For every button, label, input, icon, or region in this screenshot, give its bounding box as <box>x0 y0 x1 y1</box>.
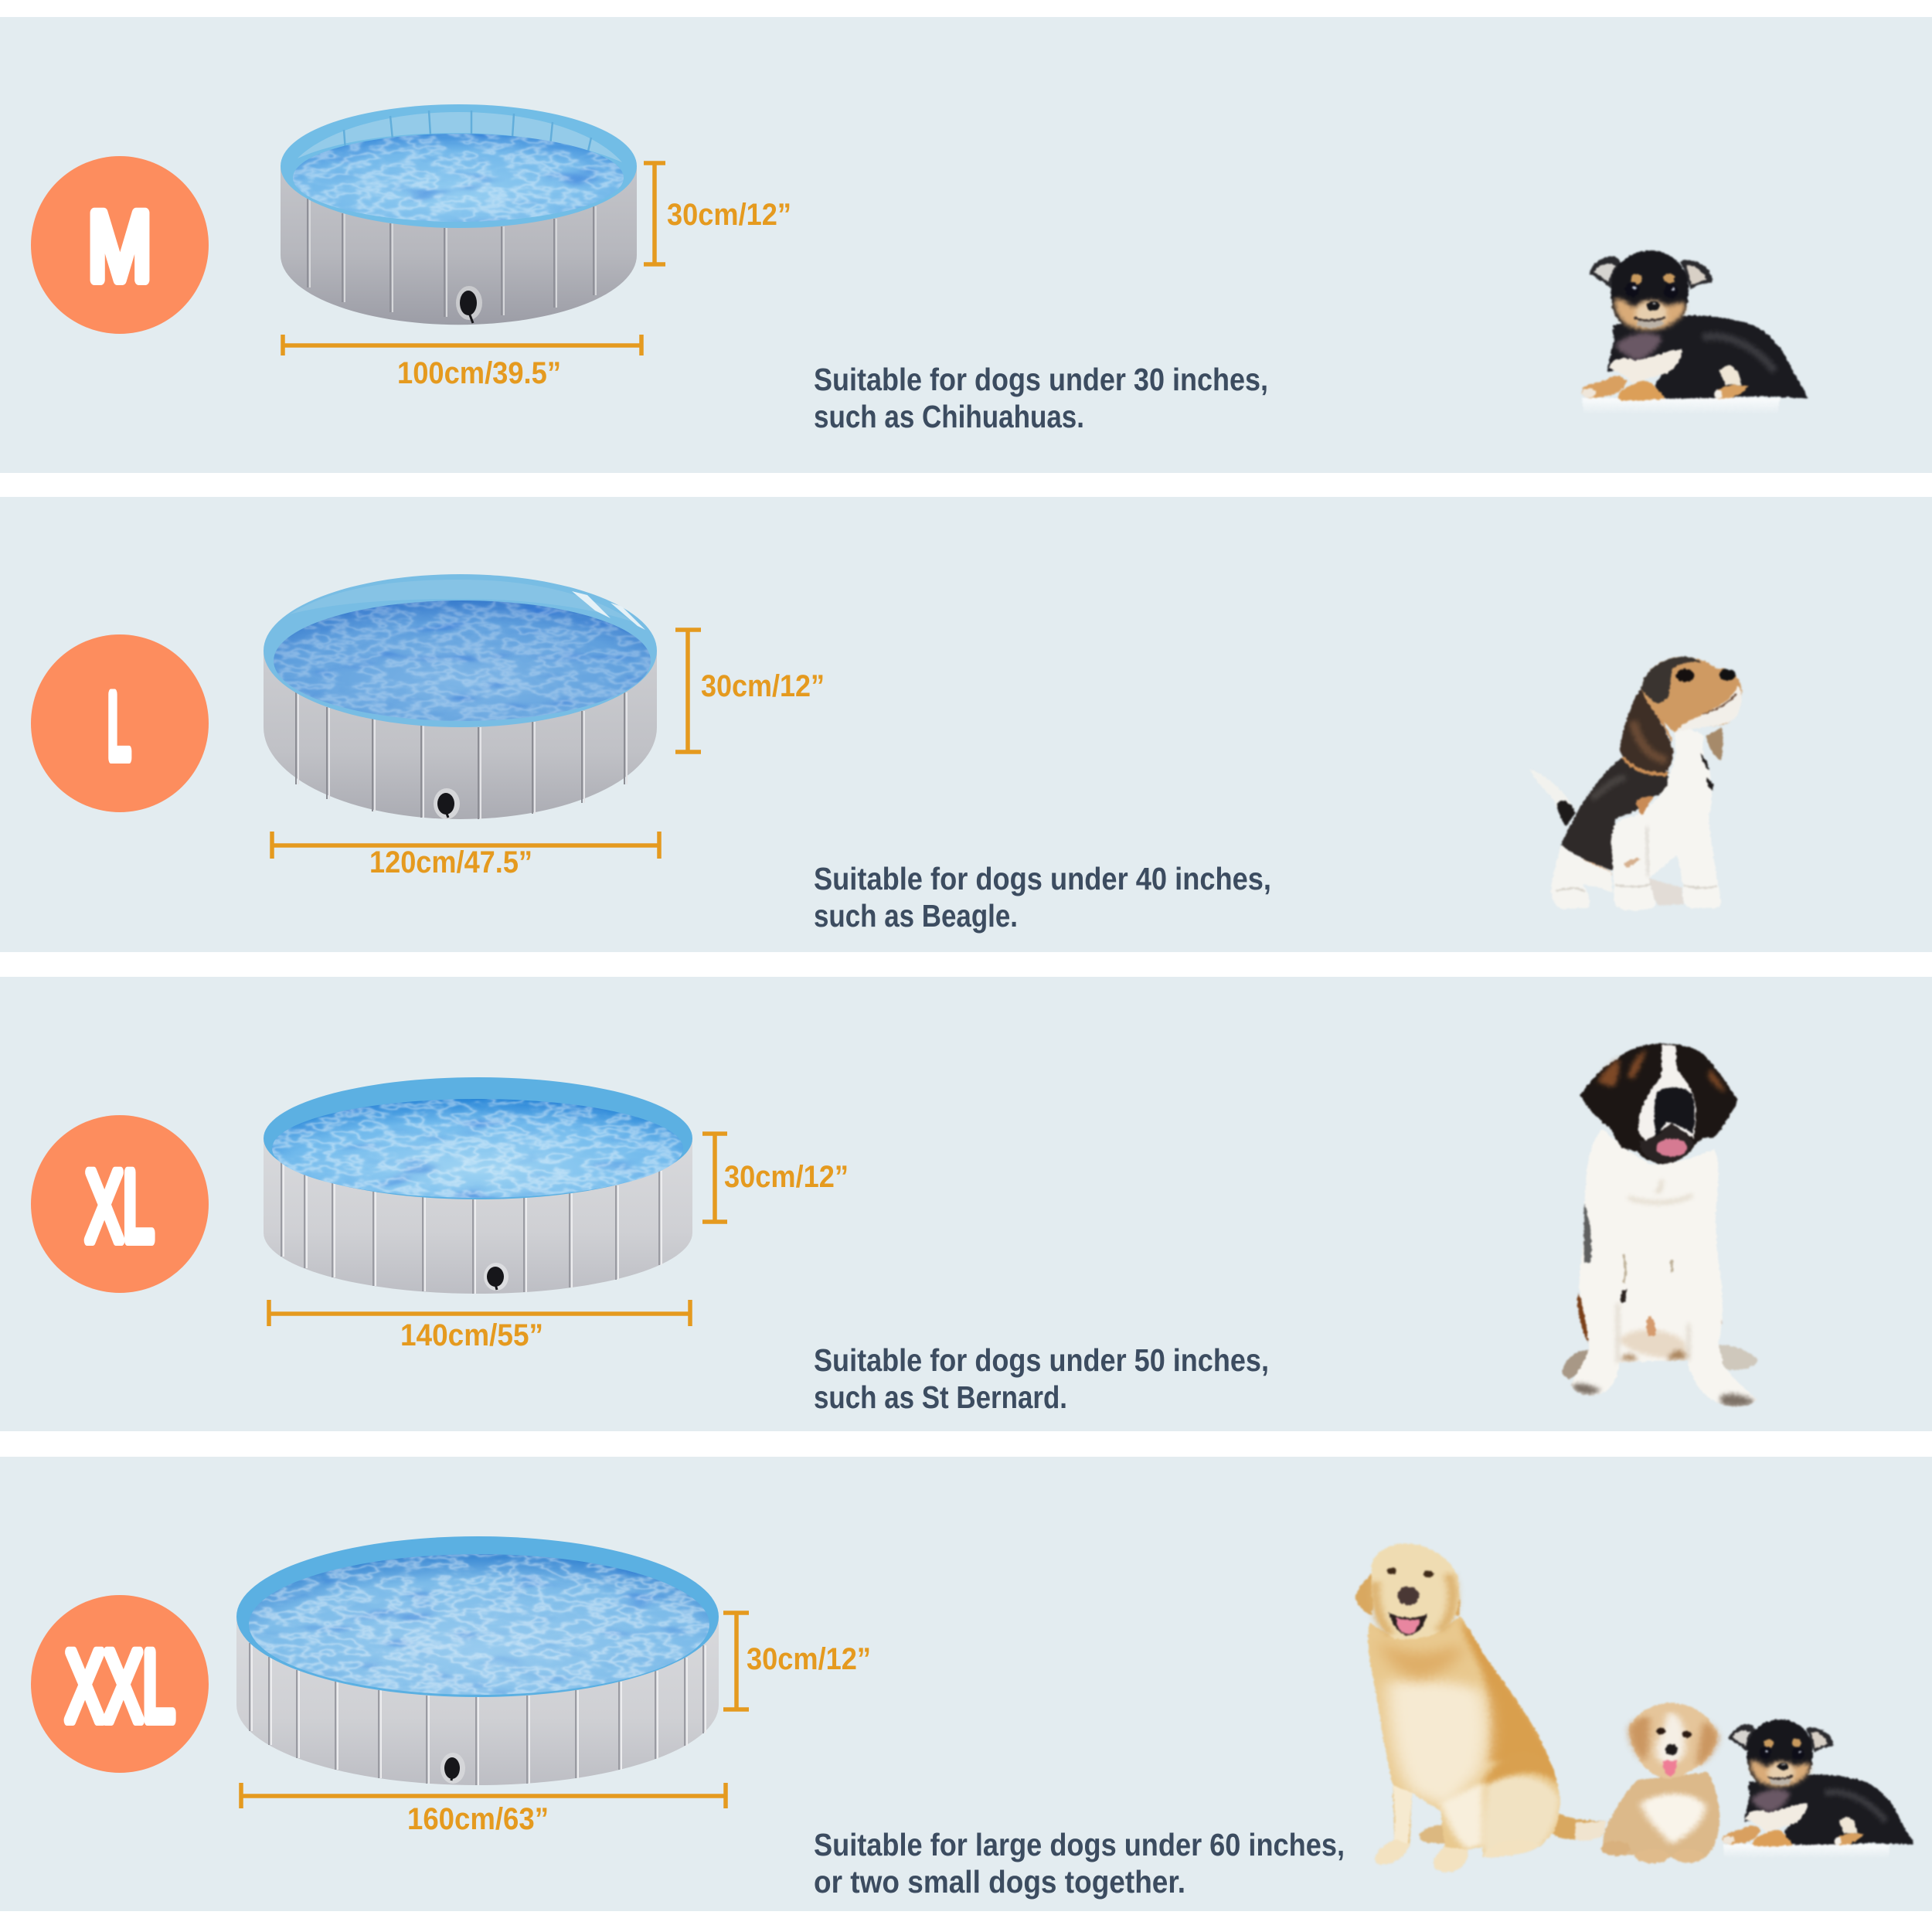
height dimension M: 30cm/12” <box>667 198 791 232</box>
width dimension XL <box>269 1300 690 1352</box>
description XL: such as St Bernard. <box>814 1379 1067 1415</box>
dog: St Bernard <box>1563 1044 1757 1406</box>
pool XL <box>264 1077 692 1294</box>
dog: chihuahua puppy <box>1582 250 1808 415</box>
height dimension XXL: 30cm/12” <box>747 1642 871 1676</box>
panel: size M <box>0 17 1932 473</box>
description XXL: or two small dogs together. <box>814 1864 1185 1900</box>
panel: size XL <box>0 977 1932 1431</box>
pool M <box>281 104 637 325</box>
drain valve <box>440 1753 465 1784</box>
size badge M: M <box>88 193 151 301</box>
height dimension XXL <box>723 1613 871 1709</box>
size badge L <box>31 634 209 812</box>
width dimension L: 120cm/47.5” <box>369 845 532 879</box>
description L: such as Beagle. <box>814 898 1018 934</box>
size badge XL <box>31 1115 209 1293</box>
pool L <box>264 574 657 819</box>
width dimension M: 100cm/39.5” <box>397 356 561 390</box>
height dimension XL <box>702 1134 849 1222</box>
description M: such as Chihuahuas. <box>814 399 1084 434</box>
size badge L: L <box>107 675 131 778</box>
size badge XXL <box>31 1595 209 1773</box>
dog: beagle puppy <box>1529 656 1742 910</box>
width dimension M <box>283 335 641 390</box>
description XL: Suitable for dogs under 50 inches, <box>814 1342 1269 1378</box>
size badge M <box>31 156 209 334</box>
drain valve <box>456 286 482 323</box>
description XL <box>814 1342 1269 1415</box>
description XXL <box>814 1827 1345 1900</box>
description L <box>814 861 1271 934</box>
width dimension L <box>272 832 659 879</box>
description M <box>814 362 1268 434</box>
width dimension XXL <box>241 1783 726 1836</box>
pool XXL <box>236 1536 719 1785</box>
description XXL: Suitable for large dogs under 60 inches, <box>814 1827 1345 1862</box>
drain valve <box>484 1263 509 1291</box>
width dimension XXL: 160cm/63” <box>407 1802 549 1836</box>
height dimension L: 30cm/12” <box>701 669 825 703</box>
height dimension M <box>644 163 791 264</box>
size badge XXL: XXL <box>66 1631 175 1742</box>
dog: havanese <box>1601 1702 1719 1863</box>
panel: size L <box>0 497 1932 952</box>
panel: size XXL <box>0 1457 1932 1911</box>
dog: golden retriever <box>1355 1543 1606 1872</box>
size badge XL: XL <box>86 1151 154 1262</box>
drain valve <box>434 788 460 819</box>
description L: Suitable for dogs under 40 inches, <box>814 861 1271 896</box>
description M: Suitable for dogs under 30 inches, <box>814 362 1268 397</box>
height dimension L <box>675 630 825 752</box>
width dimension XL: 140cm/55” <box>400 1318 543 1352</box>
dog: chihuahua puppy beside the larger dogs <box>1723 1719 1914 1859</box>
height dimension XL: 30cm/12” <box>724 1160 849 1194</box>
